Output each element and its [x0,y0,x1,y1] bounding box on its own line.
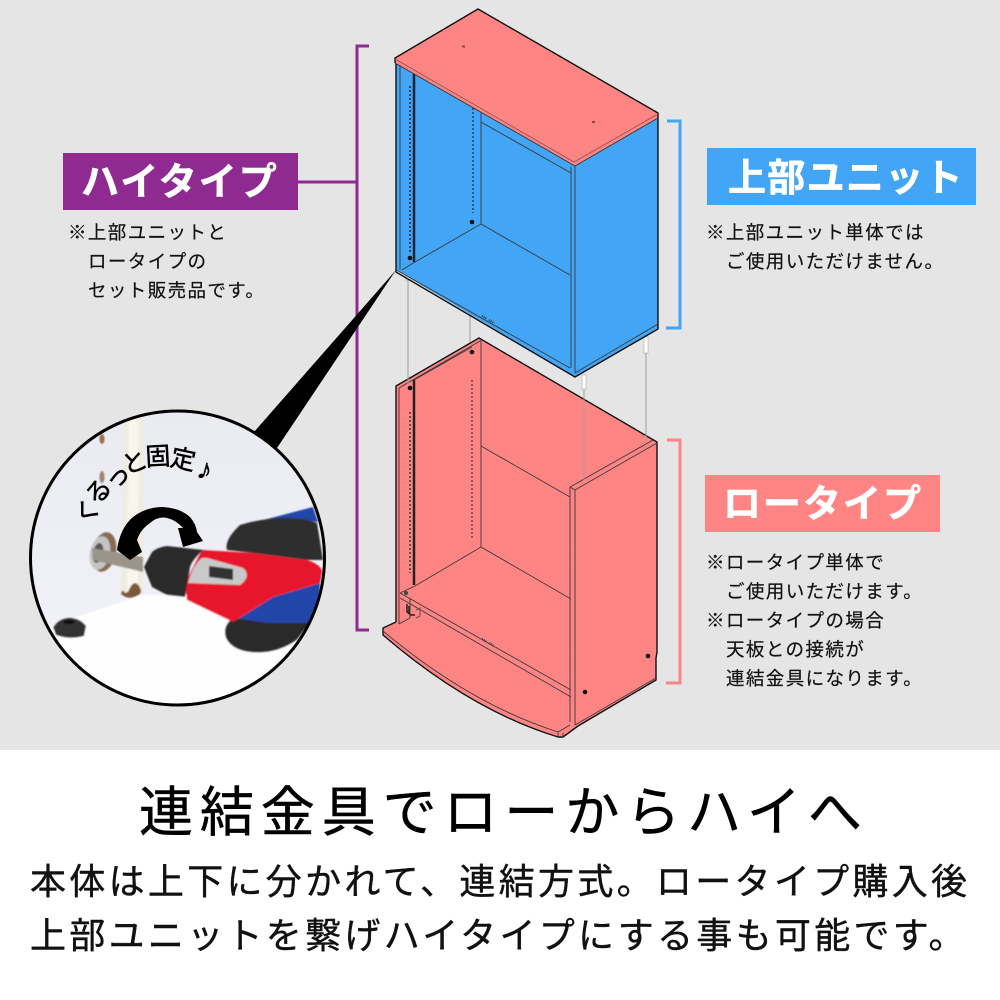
badge: upper unit: 上部ユニット [728,158,964,200]
curved label: 定 [168,444,198,476]
note: upper unit: ご使用いただけません。 [726,251,944,272]
background panel [0,0,1000,750]
driver bit [92,548,143,572]
rubber ring [53,618,86,638]
curved label: 固 [145,442,171,472]
callout wedge [254,270,396,448]
badge: high type [63,153,298,210]
curved label: る [80,473,118,511]
note: low type: 連結金具になります。 [726,668,923,689]
note: low type [706,552,923,689]
connector pins [406,231,648,389]
badge: upper unit [707,148,976,205]
wall post [121,405,143,594]
top panel of upper unit [395,9,658,166]
screw washer [96,531,118,573]
note: high type: セット販売品です。 [88,280,265,301]
note: upper unit [706,222,944,272]
note: low type: ご使用いただけます。 [726,581,923,602]
curved label: と [118,446,152,480]
connector guide lines [408,246,646,482]
lower cabinet: low type [383,338,657,737]
note: low type: ※ロータイプの場合 [706,610,885,631]
floor [30,595,340,710]
gloves [266,506,318,523]
badge: low type: ロータイプ [723,484,923,526]
headline: 連結金具でローからハイへ [139,783,869,843]
bracket: upper unit [666,121,680,328]
curved label: く [69,493,107,531]
bracket: high type [298,46,369,630]
rotation arrow [117,507,203,560]
note: high type [68,222,265,301]
badge: low type [705,475,940,532]
screwdriver handle [185,550,322,622]
note: high type: ロータイプの [88,251,207,272]
body line 2: 上部ユニットを繋げハイタイプにする事も可能です。 [30,915,968,956]
note: upper unit: ※上部ユニット単体では [706,222,925,243]
callout photo circle [30,405,340,710]
upper cabinet: upper unit [396,63,658,377]
note: high type: ※上部ユニットと [68,222,227,243]
curved label: ♪ [194,453,216,487]
bracket: low type [666,440,680,683]
badge: high type: ハイタイプ [81,162,279,204]
curved label: っ [100,458,136,496]
note: low type: ※ロータイプ単体で [706,552,885,573]
body line 1: 本体は上下に分かれて、連結方式。ロータイプ購入後 [30,861,970,902]
note: low type: 天板との接続が [726,639,865,660]
curved label [69,442,216,531]
